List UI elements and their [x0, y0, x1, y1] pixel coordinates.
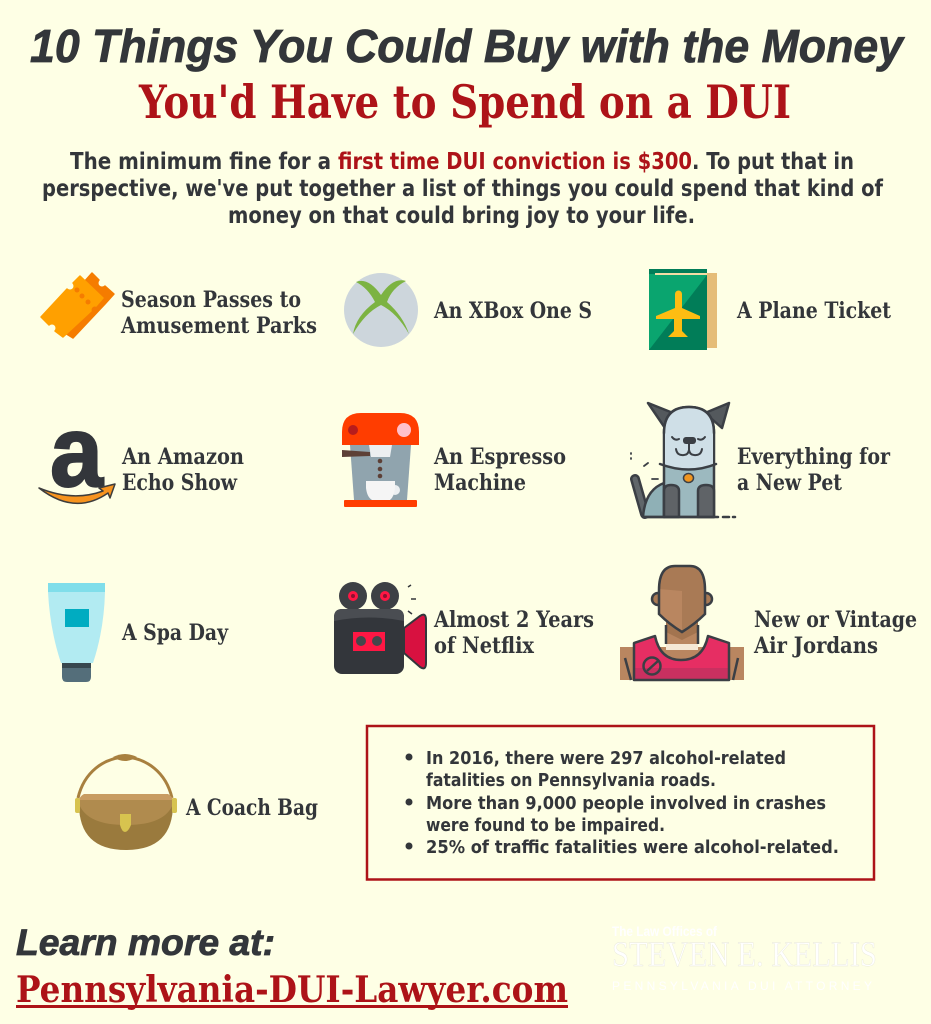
icon: ticket — [41, 273, 114, 338]
icon: bag — [75, 754, 177, 850]
item: plane ticket — [649, 269, 892, 350]
label — [433, 444, 566, 496]
item: new pet — [631, 403, 890, 517]
item: espresso machine — [342, 413, 566, 507]
item: xbox — [344, 273, 592, 347]
intro text: . To put that in — [692, 149, 854, 175]
item: season passes — [41, 273, 317, 339]
icon: espresso machine — [342, 413, 419, 507]
title: 10 Things You Could Buy with the Money — [30, 20, 905, 72]
label — [737, 444, 890, 496]
label — [433, 607, 594, 659]
label: An XBox One S — [433, 298, 592, 324]
label: Echo Show — [122, 470, 238, 496]
footer: learn more: Learn more at: — [16, 922, 275, 963]
callout: statistics box: More than 9,000 people involved in crashes — [426, 793, 826, 814]
footer: learn more: Pennsylvania-DUI-Lawyer.com — [16, 969, 568, 1011]
label — [753, 607, 917, 659]
label: Season Passes to — [121, 287, 301, 313]
icon: xbox logo — [344, 273, 418, 347]
item: air jordans — [620, 566, 917, 680]
item: netflix — [334, 582, 594, 674]
icon: amazon logo: a — [50, 396, 104, 508]
callout: statistics box: 25% of traffic fatalities were alcohol-related. — [426, 837, 839, 858]
icon: basketball player — [620, 566, 744, 680]
label: An Amazon — [121, 444, 244, 470]
icon: movie camera — [334, 582, 426, 674]
callout: statistics box: fatalities on Pennsylvania roads. — [426, 770, 716, 791]
title — [30, 20, 905, 129]
icon: lotion tube — [48, 583, 105, 682]
label: An Espresso — [433, 444, 566, 470]
label: A Plane Ticket — [736, 298, 892, 324]
label: Amusement Parks — [120, 313, 317, 339]
callout: statistics box: were found to be impaired. — [426, 815, 665, 836]
intro text: first time DUI conviction is $300 — [338, 149, 692, 175]
logo: law offices: STEVEN E. KELLIS — [612, 934, 877, 974]
intro text: money on that could bring joy to your life. — [228, 203, 695, 229]
item: spa day — [48, 583, 229, 682]
label: A Coach Bag — [185, 795, 318, 821]
label: Air Jordans — [753, 633, 878, 659]
intro text — [42, 149, 884, 229]
label — [120, 287, 317, 339]
title: You'd Have to Spend on a DUI — [138, 75, 791, 129]
label: of Netflix — [434, 633, 535, 659]
logo: law offices: The Law Offices of — [612, 923, 717, 939]
callout: statistics box — [367, 726, 874, 880]
label — [121, 444, 244, 496]
label: a New Pet — [737, 470, 843, 496]
callout: statistics box: In 2016, there were 297 alcohol-related — [426, 748, 786, 769]
intro text: The minimum fine for a — [70, 149, 331, 175]
logo: law offices: PENNSYLVANIA DUI ATTORNEY — [612, 979, 872, 993]
label: A Spa Day — [121, 620, 229, 646]
icon: plane ticket booklet — [649, 269, 717, 350]
label: Almost 2 Years — [433, 607, 594, 633]
icon: dog — [631, 403, 735, 517]
item: amazon echo — [39, 396, 244, 508]
label: Machine — [434, 470, 526, 496]
label: Everything for — [737, 444, 890, 470]
logo: law offices — [612, 923, 877, 993]
item: coach bag — [75, 754, 318, 850]
footer: learn more — [16, 922, 568, 1011]
